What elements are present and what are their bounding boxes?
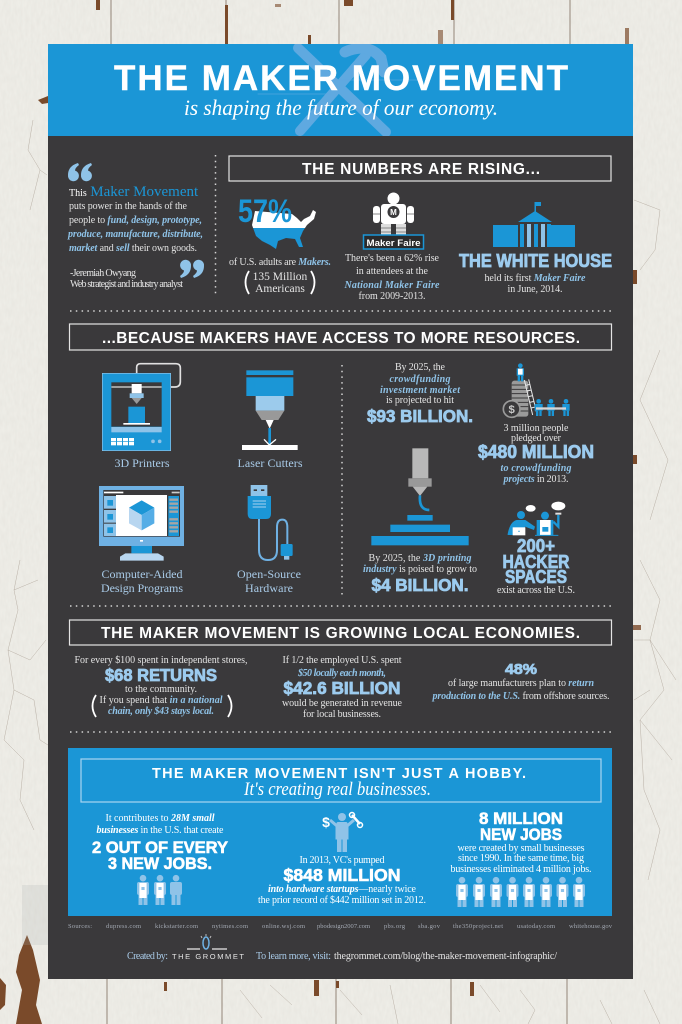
caption: from 2009-2013. [358,291,426,302]
stat: crowdfunding market: crowdfunding [390,374,450,385]
Maker Faire badge: Maker Faire [366,238,420,248]
panel: real businesses [68,748,612,916]
icon: hackers with speech bubbles [508,502,565,535]
stat: 42.6 billion: would be generated in revenue [282,698,403,709]
footer credits: THE GROMMET [172,952,244,961]
icon: crowdfunding coins and people [503,363,570,417]
stat: 848 million: the prior record of $442 million set in 2012. [258,895,426,906]
caption: in June, 2014. [508,284,562,295]
stat: 48 percent: production to the U.S. from offshore sources. [432,691,610,702]
icon: laser cutter [242,370,298,450]
footer credits [127,934,557,962]
icon: CAD monitor [99,486,184,561]
stat: 68 dollar returns: For every $100 spent in independent stores, [74,655,248,666]
heading: access to resources: ...BECAUSE MAKERS HAVE ACCESS TO MORE RESOURCES. [102,330,580,347]
panel: quote [67,163,204,290]
stat: 3D printing industry: industry is poised to grow to [363,564,477,575]
heading: THE WHITE HOUSE [459,250,612,271]
caption: of U.S. adults are Makers. [229,257,331,268]
135 million americans: 135 Million [253,271,308,283]
135 million americans: Americans [255,283,305,295]
stat: 2 out of every 3 new jobs: It contributes to 28M small [106,813,215,824]
icon: eight people [456,877,585,907]
title: THE MAKER MOVEMENT [114,59,568,98]
stat: hacker spaces: HACKER [502,552,570,572]
sources: whitehouse.gov [569,923,613,930]
heading: numbers are rising [229,156,611,181]
label: Computer-Aided [102,567,182,581]
sources: pbodesign2007.com [317,923,370,930]
stat: crowdfunding pledges: $480 MILLION [478,442,594,462]
attribution: -Jeremiah Owyang [70,268,136,279]
sources: kickstarter.com [155,923,198,930]
stat: 48 percent [432,661,610,702]
stat: 8 million new jobs: businesses eliminated 4 million jobs. [450,864,592,875]
stat: 2 out of every 3 new jobs: businesses in the U.S. that create [96,825,224,836]
sources: pbs.org [384,923,406,930]
sources: Sources: [68,923,92,930]
quote text [67,184,203,254]
stat: hacker spaces [497,536,575,596]
icon: open quote [68,163,92,181]
stat: 68 dollar returns [74,655,248,717]
stat: 8 million new jobs [450,809,592,907]
quote text: This Maker Movement [69,184,199,200]
stat: 48 percent: 48% [505,661,537,678]
caption: in attendees at the [356,266,429,277]
icon: person with dollar and wrench: $ [322,814,330,830]
stat: 848 million: In 2013, VC's pumped [300,855,384,866]
stat: 8 million new jobs: 8 MILLION [479,809,563,828]
footer credits: thegrommet.com/blog/the-maker-movement-infographic/ [334,951,557,962]
sources: online.wsj.com [262,923,305,930]
footer credits: To learn more, visit: [256,951,331,962]
stat: white house [459,202,612,295]
stat: 42.6 billion: If 1/2 the employed U.S. spent [282,655,402,666]
icon: three people [137,875,182,905]
heading: local economies: THE MAKER MOVEMENT IS GROWING LOCAL ECONOMIES. [101,625,580,642]
stat: crowdfunding pledges [478,423,594,485]
panel: market stats [363,362,594,596]
stat: hacker spaces: SPACES [505,567,567,587]
stat: 2 out of every 3 new jobs: 3 NEW JOBS. [108,854,212,873]
stat: national maker faire [344,192,440,302]
stat: 42.6 billion: $42.6 BILLION [284,678,400,698]
header band [48,44,633,136]
stat: 2 out of every 3 new jobs [92,813,229,905]
stat: 68 dollar returns: $68 RETURNS [105,665,217,685]
heading: not just a hobby [81,759,601,802]
stat: crowdfunding pledges: 3 million people [504,423,569,434]
heading: not just a hobby: It's creating real businesses. [243,779,431,800]
attribution [70,268,183,290]
sources: usatoday.com [517,923,555,930]
stat: crowdfunding pledges: projects in 2013. [502,474,568,485]
heading: local economies [70,620,612,645]
icon: crowdfunding coins and people: $ [509,404,516,416]
stat: crowdfunding pledges: to crowdfunding [500,463,572,474]
stat: 848 million: into hardware startups—nearly twice [268,884,417,895]
caption: National Maker Faire [344,280,440,291]
stat: 8 million new jobs: NEW JOBS [480,825,562,844]
label [101,567,183,595]
poster panel [48,44,633,979]
label: Design Programs [101,581,183,595]
quote text: market and sell their own goods. [69,243,197,254]
footer credits: Created by: [127,951,168,962]
stat: 3D printing industry [363,553,477,595]
stat: 848 million [258,812,426,906]
heading: numbers are rising: THE NUMBERS ARE RISING... [302,161,540,178]
stat: 68 dollar returns: chain, only $43 stays local. [108,706,214,717]
stat: 48 percent: of large manufacturers plan to return [448,678,594,689]
heading: not just a hobby: THE MAKER MOVEMENT ISN'T JUST A HOBBY. [152,766,526,782]
heading: access to resources [70,324,612,350]
sources: sba.gov [418,923,441,930]
icon: White House [493,202,575,247]
stat: 68 dollar returns: If you spend that in a national [100,695,223,706]
stat: 2 out of every 3 new jobs: 2 OUT OF EVERY [92,838,229,857]
stat: 42.6 billion: for local businesses. [303,709,381,720]
caption [484,273,586,295]
stat: crowdfunding market: By 2025, the [395,362,446,373]
stat: 68 dollar returns: to the community. [125,684,197,695]
icon: Maker Faire robot: M [390,208,397,217]
label [237,567,301,595]
sources: the350project.net [453,923,503,930]
stat: hacker spaces: 200+ [517,536,555,556]
icon: crossed hammer and wrench [258,48,422,132]
quote text: puts power in the hands of the [69,201,188,212]
sources [68,923,613,930]
icon: USA map [252,210,316,249]
icon: close quote [180,260,204,278]
icon: person with dollar and wrench [322,812,362,852]
attribution: Web strategist and industry analyst [70,279,183,290]
icon: 3D printer [102,364,180,451]
stat: crowdfunding pledges: pledged over [511,433,562,444]
label: Laser Cutters [238,456,303,470]
stat: 848 million: $848 MILLION [284,865,400,885]
stat: 8 million new jobs: were created by small businesses [458,843,585,854]
stat: 8 million new jobs: since 1990. In the same time, big [458,853,584,864]
icon: USB cable [248,485,293,560]
stat: crowdfunding market: $93 BILLION. [367,406,473,426]
caption: There's been a 62% rise [345,253,440,264]
icon: 3D printing nozzle and layers [371,448,469,545]
stat: crowdfunding market [367,362,473,426]
caption: held its first Maker Faire [484,273,586,284]
stat: 42.6 billion [282,655,403,720]
57 percent figure: 57% [238,193,292,229]
stat: 57 percent makers [229,193,331,295]
stat: 3D printing industry: $4 BILLION. [372,575,468,595]
sources: dupress.com [106,923,141,930]
stat: crowdfunding market: is projected to hit [386,395,454,406]
stat: 42.6 billion: $50 locally each month, [297,668,386,679]
quote text: people to fund, design, prototype, [69,215,202,226]
stat: 3D printing industry: By 2025, the 3D printing [368,553,472,564]
quote text: produce, manufacture, distribute, [67,229,203,240]
label: 3D Printers [114,456,170,470]
label: Hardware [245,581,293,595]
panel: tools [99,364,303,595]
stat: hacker spaces: exist across the U.S. [497,585,575,596]
icon: Grommet logo [187,934,227,949]
label: Open-Source [237,567,301,581]
stat: crowdfunding market: investment market [380,385,461,396]
135 million americans [246,271,314,295]
sources: nytimes.com [212,923,248,930]
subtitle: is shaping the future of our economy. [184,95,498,120]
caption [344,253,440,302]
